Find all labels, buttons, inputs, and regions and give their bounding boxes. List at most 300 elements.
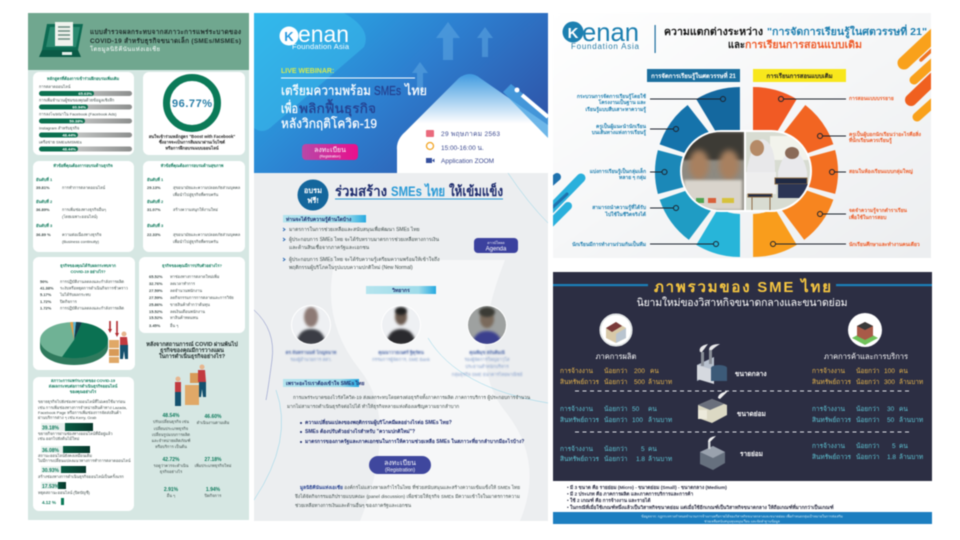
post-COVID plans: 48.54% xyxy=(163,413,180,419)
card: business adaptations: 25.86% xyxy=(149,302,163,307)
benefits list: มาตรการในการช่วยเหลือและสนับสนุนเพื่อพัฒนา SMEs ไทย xyxy=(289,226,420,233)
medium tier: 100 xyxy=(884,368,895,375)
micro tier xyxy=(560,436,923,470)
survey title: โดยมูลนิธิคีนันแห่งเอเชีย xyxy=(90,45,160,53)
card: health training topics: 31.07% xyxy=(147,207,161,212)
card: online impact bars: 17.53% xyxy=(42,484,60,490)
card: health training topics: สุขอนามัยและความปลอดภัยส่วนบุคคล xyxy=(173,185,241,191)
card: impact with pie chart: การปฏิบัติงานลดลงและกำลังการผลิต xyxy=(60,306,124,310)
panel: SME overview xyxy=(553,272,932,524)
micro tier: สินทรัพย์ถาวร xyxy=(560,455,600,463)
card: business training topics: 36.89% xyxy=(36,207,50,212)
card: courses with bars: เครือข่าย SMEs/MSMEs xyxy=(39,140,82,144)
card: business adaptations: 65.52% xyxy=(149,274,163,279)
right labels: เพื่อใช้ในการสอบ xyxy=(849,213,886,221)
medium tier: การจ้างงาน xyxy=(812,367,846,375)
card: business adaptations: อื่น ๆ xyxy=(169,323,178,328)
small tier: 50 xyxy=(887,417,895,424)
small tier: 30 xyxy=(887,406,895,413)
comparison title: ความแตกต่างระหว่าง xyxy=(664,26,763,38)
card: online impact bars: เช่น การเพิ่มช่องทางการจำหน่ายสินค้าทาง Lazada, xyxy=(38,405,127,410)
benefits list: และด้านสินเชื่อจากภาครัฐและเอกชน xyxy=(289,244,370,251)
right labels: ครูเป็นผู้บอกนักเรียนว่าอะไรคือสิ่ง xyxy=(849,130,922,139)
medium tier: น้อยกว่า xyxy=(856,378,880,386)
card: online impact bars: ของคุณอย่างไร xyxy=(70,389,97,395)
logo: Kenan blue: enan xyxy=(582,17,639,47)
registration button: ลงทะเบียน xyxy=(384,459,416,467)
card: online impact bars: สภาวะการแพร่ระบาดของ COVID-19 xyxy=(51,378,116,383)
comparison title: และ xyxy=(728,40,745,51)
card: business training topics: การทำการตลาดออนไลน์ xyxy=(62,185,105,190)
logo: Kenan white: enan xyxy=(298,21,349,47)
card: courses with bars: การเพิ่มจำนวนผู้ชมของคุณด้วยข้อมูลเชิงลึก xyxy=(39,98,115,104)
micro tier: คน xyxy=(648,446,657,453)
definition notes: • ใช้ 2 เกณฑ์ คือ การจ้างงาน และรายได้ xyxy=(567,497,651,504)
pie chart xyxy=(40,322,108,365)
card: online impact bars: สถานะออนไลน์ยังคงเหมือนเดิม xyxy=(38,453,92,458)
micro tier: น้อยกว่า xyxy=(604,445,628,453)
card: impact with pie chart: ปิดกิจการ xyxy=(59,299,78,304)
card: business adaptations: ลดจำนวนพนักงาน xyxy=(170,288,202,293)
panel: live webinar poster xyxy=(254,13,548,521)
definition notes xyxy=(567,484,834,511)
tab: traditional teaching: การเรียนการสอนแบบเดิม xyxy=(766,72,833,80)
card: online impact bars: ผ่านบริการต่าง ๆ เช่น Kerry, Grab xyxy=(38,415,97,420)
register button xyxy=(302,144,358,160)
right labels: นักเรียนศึกษาและทำงานคนเดียว xyxy=(849,241,920,248)
small tier: 50 xyxy=(632,406,640,413)
right ring xyxy=(664,83,842,261)
definition notes: • มี 2 ประเภท คือ ภาคการผลิต และภาคการบริการและการค้า xyxy=(567,490,693,498)
card: impact with pie chart: ไม่ได้รับผลกระทบ xyxy=(59,292,91,297)
overview title xyxy=(553,277,932,309)
speaker 3 xyxy=(452,305,523,378)
icon: micro factory xyxy=(700,436,725,470)
card: online impact bars: ขยายธุรกิจไปยังช่องทางออนไลน์ที่ไม่เคยใช้มาก่อน xyxy=(38,399,126,405)
speaker 2: กรรมการผู้จัดการ, SME Bank xyxy=(372,357,431,363)
why help SMEs xyxy=(283,379,531,445)
post-COVID plans: ธุรกิจอย่างไร xyxy=(160,469,183,475)
panel: 21st century learning comparison xyxy=(548,13,937,261)
card: impact with pie chart: การปฏิบัติงานลดลงและกำลังการผลิต xyxy=(60,279,124,284)
small tier: ขนาดย่อม xyxy=(737,410,766,418)
why help SMEs: SMEs ต้องปรับตัวอย่างไรสำหรับ "ความปกติใหม่"? xyxy=(305,428,415,435)
card: business adaptations: หาสินค้าทดแทน xyxy=(170,315,198,320)
post-COVID plans: หรือบริการ เป็นต้น xyxy=(155,443,187,449)
card: business adaptations: 32.76% xyxy=(149,281,163,286)
card: business training topics: อันดับที่ 1 xyxy=(36,176,53,182)
medium tier xyxy=(560,344,923,386)
card: impact with pie chart: ธุรกิจของคุณได้รับผลกระทบจาก xyxy=(60,262,116,269)
speaker 3: คุณพิมุข สงันติมณี xyxy=(469,349,506,356)
medium tier: สินทรัพย์ถาวร xyxy=(560,378,600,386)
card: courses with bars: การตลาดออนไลน์ xyxy=(39,84,71,89)
register button: ลงทะเบียน xyxy=(314,146,346,154)
logo: Kenan white: Foundation Asia xyxy=(292,42,350,51)
card: business adaptations: หาช่องทางการตลาดใหม่เพิ่ม xyxy=(170,274,220,279)
card: impact with pie chart: 41.38% xyxy=(40,286,54,290)
card: health training topics: เพื่อนำไปสู่ธุรกิจที่ครบครัน xyxy=(173,192,219,198)
small tier: 100 xyxy=(632,417,643,424)
logo: Kenan blue xyxy=(562,17,640,51)
micro tier: 1.8 xyxy=(636,456,645,463)
card: courses with bars: หลักสูตรที่ต้องการเข้าร่วมฝึกอบรมเพิ่มเติม xyxy=(47,75,119,82)
card: health training topics: อันดับที่ 3 xyxy=(147,222,164,228)
card: impact with pie chart: 1.72% xyxy=(40,306,52,310)
post-COVID plans: รอดูว่าควรจะดำเนิน xyxy=(154,463,189,469)
source band xyxy=(553,512,932,524)
speaker 3: กลุ่มธุรกิจ SME ธนาคารไทยพาณิชย์ xyxy=(452,371,523,378)
card: business training topics: ความต่อเนื่องทางธุรกิจ xyxy=(62,232,101,238)
registration button xyxy=(369,456,431,474)
speaker 3: รองผู้จัดการใหญ่อาวุโส xyxy=(464,356,510,363)
icon: medium factory xyxy=(697,344,727,384)
card: business training topics: อันดับที่ 2 xyxy=(36,198,53,204)
benefits list: ผู้ประกอบการ SMEs ไทย จะได้รับทราบมาตรการช่วยเหลือทางการเงิน xyxy=(289,236,440,243)
right callouts xyxy=(770,96,846,246)
decorative up arrows xyxy=(412,22,493,93)
card: courses with bars xyxy=(33,72,134,155)
event details: 15:00-16:00 น. xyxy=(441,145,484,152)
icon: laptop with document xyxy=(39,22,83,57)
webinar title: หลังวิกฤติโควิด-19 xyxy=(281,116,377,131)
card: impact with pie chart: 50% xyxy=(40,279,48,284)
speaker 3: ประธานสำหนักบริหาร xyxy=(465,363,509,369)
card: health training topics: เพื่อนำไปสู่ธุรกิจที่ครบครัน xyxy=(173,239,219,245)
card: business adaptations: ธุรกิจของคุณมีการปรับตัวอย่างไร? xyxy=(162,262,223,269)
soft background shapes xyxy=(254,173,548,521)
small tier: ล้านบาท xyxy=(899,416,923,424)
comparison title: การเรียนการสอนแบบเดิม xyxy=(745,39,862,51)
small tier xyxy=(560,391,923,424)
post-COVID plans: 27.18% xyxy=(205,457,222,463)
logo: Kenan blue: Foundation Asia xyxy=(571,42,640,51)
speakers heading xyxy=(366,286,436,294)
right labels: การสอนแบบบรรยาย xyxy=(849,96,894,102)
micro tier: คน xyxy=(899,443,908,450)
left labels: นักเรียนมีการทำงานร่วมกันเป็นทีม xyxy=(572,240,646,248)
manufacturing sector label: ภาคการผลิต xyxy=(596,352,637,361)
card: business adaptations: ลดเงินเดือนพนักงาน xyxy=(170,309,205,314)
speaker 2 xyxy=(372,305,431,363)
logo: Kenan blue: K xyxy=(568,25,579,42)
small tier: การจ้างงาน xyxy=(560,405,594,413)
tab: 21st century learning xyxy=(647,69,740,82)
card: courses with bars: Instagram สำหรับธุรกิจ xyxy=(39,126,79,132)
left labels: ไปใช้ในชีวิตจริงได้ xyxy=(604,211,646,218)
speaker 1: รองผู้อำนวยการ สสว. xyxy=(290,356,332,363)
card: courses with bars: 48.44% xyxy=(62,146,76,152)
left labels: หลาย ๆ กลุ่ม xyxy=(619,174,646,181)
micro tier: น้อยกว่า xyxy=(856,453,880,461)
post-COVID plans: หลังจากสถานการณ์ COVID ผ่านพ้นไป xyxy=(146,340,238,348)
post-COVID plans: ในการดำเนินธุรกิจอย่างไร? xyxy=(159,352,226,360)
left labels: แบ่งการเรียนรู้เป็นกลุ่มเล็ก xyxy=(590,167,646,176)
panel: survey infographic xyxy=(28,13,249,520)
card: donut 96.77%: ซึ่งอาจจะเป็นการสัมมนาผ่านเว็บไซต์ xyxy=(159,138,225,144)
foundation note: มูลนิธิคีนันแห่งเอเชีย องค์กรไม่แสวงหาผลกำไรในไทย ที่ช่วยสนับสนุนและสร้างความเข้มแข็งให้ SMEs ไทย xyxy=(300,483,520,492)
medium tier: 500 xyxy=(634,379,645,386)
post-COVID plans: 2.91% xyxy=(164,487,179,493)
free training badge: อบรม xyxy=(304,186,322,195)
agenda button: Agenda xyxy=(486,246,507,252)
card: business adaptations: 27.59% xyxy=(149,288,163,293)
card: online impact bars: สร้างช่องทางการดำเนินธุรกิจออนไลน์เป็นครั้งแรก xyxy=(38,472,124,480)
card: online impact bars: ส่งผลกระทบต่อการดำเนินธุรกิจออนไลน์ xyxy=(49,384,118,390)
medium tier: 300 xyxy=(884,379,895,386)
micro tier: น้อยกว่า xyxy=(856,442,880,450)
post-COVID plans: 42.72% xyxy=(163,457,180,463)
right labels: ที่นักเรียนควรเรียนรู้ xyxy=(849,136,892,145)
survey header xyxy=(28,13,249,70)
left labels: เรียนรู้แบบสืบเสาะหาความรู้ xyxy=(585,106,646,114)
icon: workers lifting boxes xyxy=(175,364,206,406)
micro tier: 5 xyxy=(641,446,645,453)
right labels: สอนในห้องเรียนแบบกลุ่มใหญ่ xyxy=(849,168,914,175)
event details xyxy=(426,130,500,165)
micro tier: การจ้างงาน xyxy=(560,445,594,453)
card: health training topics: 29.13% xyxy=(147,185,161,190)
small tier: คน xyxy=(899,406,908,413)
benefits list: ผู้ประกอบการ SMEs ไทย จะได้รับความรู้เตรียมความพร้อมให้เข้าใจถึง xyxy=(289,256,440,263)
left labels xyxy=(572,93,647,248)
medium tier: น้อยกว่า xyxy=(856,367,880,375)
why help SMEs: มาตรการของภาครัฐและภาคเอกชนในการให้ความช่วยเหลือ SMEs ในสภาวะที่ยากลำบากมีอะไรบ้าง? xyxy=(305,437,524,445)
speaker 1: ดร.จันทรานนท์ โกญจนาท xyxy=(286,349,336,356)
post-COVID plans: เปลี่ยนรูปแบบการผลิต xyxy=(152,432,190,438)
logo: Kenan white xyxy=(280,21,350,51)
survey title: แบบสำรวจผลกระทบจากสภาวะการแพร่ระบาดของ xyxy=(90,28,241,36)
why help SMEs: เพราะอะไรเราต้องเข้าใจ SMEs ไทย xyxy=(286,380,364,387)
micro tier: ล้านบาท xyxy=(899,453,923,461)
webinar hero banner xyxy=(254,13,548,173)
card: donut 96.77%: 96.77% xyxy=(172,98,212,110)
small tier: การจ้างงาน xyxy=(812,405,846,413)
card: business training topics: การเพิ่มช่องทางธุรกิจอื่นๆ xyxy=(62,207,106,213)
section heading: ร่วมสร้าง xyxy=(335,183,387,199)
card: courses with bars: 48.44% xyxy=(62,132,76,138)
webinar title: พลิกฟื้นธุรกิจ xyxy=(299,99,376,117)
card: donut 96.77%: หรือการฝึกอบรมแบบออนไลน์ xyxy=(165,144,219,150)
right labels xyxy=(849,96,922,248)
icon: worker with boxes and down arrows xyxy=(108,321,128,363)
right labels: จดจำความรู้จากตำราเรียน xyxy=(849,207,907,215)
benefits list: พฤติกรรมผู้บริโภคในรูปแบบความปกติใหม่ (New Normal) xyxy=(289,264,413,271)
card: business adaptations xyxy=(139,257,245,333)
card: courses with bars: 65.63% xyxy=(78,91,92,96)
card: health training topics xyxy=(143,161,245,252)
icon: small factory xyxy=(698,391,728,423)
small tier: น้อยกว่า xyxy=(604,416,628,424)
agenda button xyxy=(474,238,518,253)
overview title: นิยามใหม่ของวิสาหกิจขนาดกลางและขนาดย่อม xyxy=(637,296,848,309)
card: health training topics: อันดับที่ 1 xyxy=(147,176,164,182)
foundation note xyxy=(295,483,520,509)
medium tier: 200 xyxy=(634,368,645,375)
speaker 1 xyxy=(286,305,336,363)
card: online impact bars: 39.18% xyxy=(42,426,60,432)
micro tier: การจ้างงาน xyxy=(812,442,846,450)
foundation note: จึงได้จัดกิจกรรมอภิปรายแบบคณะ (panel discussion) เพื่อช่วยให้ธุรกิจ SMEs มีความเข้าใจในมาตรการความ xyxy=(295,493,520,500)
post-COVID plans: 1.94% xyxy=(206,487,221,493)
card: courses with bars: การลงโฆษณาใน Facebook (Facebook Ads) xyxy=(39,112,117,116)
card: online impact bars: 4.12 % xyxy=(42,500,56,505)
card: impact with pie chart: 5.17% xyxy=(40,292,52,297)
card: online impact bars: ไม่มีการเปลี่ยนแปลงแนวทางการทำการตลาดออนไลน์ xyxy=(37,458,131,463)
card: health training topics: สร้างความสนุกให้งานใหม่ xyxy=(173,207,218,213)
foundation note: ช่วยเหลือทางการเงินและด้านอื่นๆ ของภาครัฐและเอกชน xyxy=(295,502,412,509)
left ring xyxy=(651,83,829,261)
post-COVID plans: ธุรกิจของคุณมีการวางแผน xyxy=(160,347,224,354)
medium tier: สินทรัพย์ถาวร xyxy=(812,378,852,386)
free training badge xyxy=(298,180,328,210)
card: business adaptations: 15.52% xyxy=(149,309,163,314)
comparison title: "การจัดการเรียนรู้ในศตวรรษที่ 21" xyxy=(767,24,927,39)
section heading xyxy=(335,182,503,200)
micro tier: รายย่อม xyxy=(740,450,763,458)
card: business adaptations: 15.52% xyxy=(149,315,163,320)
free training badge: ฟรี! xyxy=(307,196,319,205)
micro tier: 1.8 xyxy=(887,454,896,461)
post-COVID plans: ปิดกิจการ xyxy=(204,493,222,498)
card: online impact bars: หยุดสถานะออนไลน์ (ปิดบัญชี) xyxy=(38,490,91,496)
micro tier: สินทรัพย์ถาวร xyxy=(812,453,852,461)
post-COVID plans: เพิ่มประเภทธุรกิจใหม่ xyxy=(195,463,232,469)
card: business training topics: 39.81% xyxy=(36,185,50,190)
card: impact with pie chart: 1.72% xyxy=(40,299,52,304)
medium tier: คน xyxy=(650,368,659,375)
small tier: ล้านบาท xyxy=(648,416,672,424)
speakers heading: วิทยากร xyxy=(392,287,410,294)
left labels: โครงงานเป็นฐาน และ xyxy=(598,98,646,106)
why help SMEs: มากไม่สามารถดำเนินธุรกิจต่อไปได้ ทำให้ธุรกิจหลายแห่งต้องเผชิญความยากลำบาก xyxy=(287,403,459,410)
registration button: (Registration) xyxy=(385,468,415,474)
overview title: ภาพรวมของ SME ไทย xyxy=(654,277,831,296)
post-COVID plans xyxy=(146,340,238,498)
card: business training topics: หัวข้อที่คุณต้องการอบรมด้านธุรกิจ xyxy=(53,162,113,169)
card: business adaptations: ลดเวลาทำการ xyxy=(170,281,196,286)
card: business adaptations: ลดกิจกรรมการการตลาดและการวิจัย xyxy=(170,295,234,300)
card: courses with bars: 60.94% xyxy=(72,104,86,110)
agenda button: ดาวน์โหลด xyxy=(487,240,505,245)
classroom photo xyxy=(680,130,812,212)
micro tier: น้อยกว่า xyxy=(604,455,628,463)
small tier: สินทรัพย์ถาวร xyxy=(812,416,852,424)
micro tier: ล้านบาท xyxy=(648,455,672,463)
webinar title: เตรียมความพร้อม xyxy=(281,83,371,98)
card: online impact bars: Facebook Page หรือการเพิ่มช่องการจัดส่งสินค้า xyxy=(38,410,121,415)
medium tier: น้อยกว่า xyxy=(604,378,628,386)
medium tier: ล้านบาท xyxy=(899,378,923,386)
card: impact with pie chart: ระงับหรือหยุดการดำเนินกิจการชั่วคราว xyxy=(60,286,128,292)
definition notes: • ในกรณีที่เมื่อใช้เกณฑ์หนึ่งแล้วเป็นวิสาหกิจขนาดย่อม แต่เมื่อใช้อีกเกณฑ์เป็นวิสาหกิจขนาดกลาง ให้ถือเกณฑ์ที่มากกว่าเป็นเกณฑ์ xyxy=(567,503,834,511)
webinar title: SMEs xyxy=(374,83,401,98)
section heading: SMEs ไทย xyxy=(391,182,445,199)
card: business adaptations: 3.45% xyxy=(149,323,161,328)
post-COVID plans: อื่น ๆ xyxy=(166,493,175,498)
medium tier: น้อยกว่า xyxy=(604,367,628,375)
left labels: ครูเป็นผู้แนะนำนักเรียน xyxy=(596,122,647,131)
comparison title xyxy=(664,24,927,51)
small tier: น้อยกว่า xyxy=(604,405,628,413)
medium tier: การจ้างงาน xyxy=(560,367,594,375)
post-COVID plans: และจำหน่ายผลิตภัณฑ์ xyxy=(152,438,190,443)
small tier: น้อยกว่า xyxy=(856,405,880,413)
card: business adaptations: 27.59% xyxy=(149,295,163,300)
section heading: ให้เข้มแข็ง xyxy=(449,182,503,199)
card: impact with pie chart: COVID-19 อย่างไร? xyxy=(70,269,106,274)
card: impact with pie chart xyxy=(33,257,135,370)
left callouts xyxy=(650,96,726,246)
survey title: COVID-19 สำหรับธุรกิจขนาดเล็ก (SMEs/MSMEs) xyxy=(90,36,241,45)
speaker 2: คุณนาวาธเนศร์ ฐิตุรัตน xyxy=(378,349,425,356)
post-COVID plans: เปลี่ยนประเภทธุรกิจ xyxy=(154,426,188,432)
card: courses with bars: 59.38% xyxy=(69,118,83,124)
webinar title: LIVE WEBINAR: xyxy=(281,68,334,75)
card: health training topics: อันดับที่ 2 xyxy=(147,198,164,204)
icon: trade and service sector xyxy=(848,313,882,347)
register button: (Registration) xyxy=(319,154,341,158)
decoration: orange stripes xyxy=(904,33,937,117)
card: donut 96.77%: สนใจเข้าร่วมหลักสูตร "Boost with Facebook" xyxy=(149,133,235,140)
small tier: น้อยกว่า xyxy=(856,416,880,424)
card: health training topics: หัวข้อที่คุณต้องการอบรมด้านสุขภาพ xyxy=(161,162,224,169)
micro tier: 5 xyxy=(892,443,896,450)
post-COVID plans: ปรับเปลี่ยนธุรกิจ เช่น xyxy=(153,419,189,425)
webinar title: เพื่อ xyxy=(281,100,298,116)
card: health training topics: 22.33% xyxy=(147,232,161,237)
decoration: blue stripes xyxy=(548,177,581,226)
why help SMEs: ความเปลี่ยนแปลงของพฤติกรรมผู้บริโภคมีผลอย่างไรต่อ SMEs ไทย? xyxy=(305,418,452,427)
left labels: สามารถนำความรู้ที่ได้รับ xyxy=(592,203,646,212)
webinar title xyxy=(281,68,427,131)
survey title xyxy=(90,28,241,53)
card: online impact bars: เช่น ออกไปยังต้นไม้ใหม่ xyxy=(38,436,80,441)
card: business training topics: (Business continuity) xyxy=(62,239,100,244)
card: business training topics: อันดับที่ 3 xyxy=(36,222,53,228)
card: online impact bars xyxy=(33,377,134,511)
card: business training topics: (โดยเฉพาะออนไลน์) xyxy=(62,214,98,219)
post-COVID plans: 46.60% xyxy=(205,414,222,420)
source band: ช่วยเหลือสนับสนุนทุนหมุนเวียน และจัดทำฐานข้อมูล xyxy=(704,518,780,524)
card: donut 96.77% xyxy=(143,72,245,155)
webinar title: ไทย xyxy=(404,83,427,98)
card: online impact bars: 30.93% xyxy=(42,468,60,474)
small tier: คน xyxy=(648,406,657,413)
card: health training topics: สุขอนามัยและความปลอดภัยส่วนบุคคล xyxy=(173,232,241,238)
card: business training topics xyxy=(33,161,134,252)
small tier: สินทรัพย์ถาวร xyxy=(560,416,600,424)
card: online impact bars: ขยายกิจการผ่านช่องทางออนไลน์ที่มีอยู่แล้ว xyxy=(38,431,113,437)
card: online impact bars: 36.08% xyxy=(42,448,60,454)
tab: 21st century learning: การจัดการเรียนรู้ในศตวรรษที่ 21 xyxy=(651,71,737,81)
why help SMEs: การแพร่ระบาดของไวรัสโควิด-19 ส่งผลกระทบโดยตรงต่อธุรกิจทั้งภาคการผลิต ภาคการบริการ ผู้ประกอบการจำนวน xyxy=(293,393,531,401)
icon: manufacturing sector xyxy=(599,313,633,347)
left labels: กระบวนการจัดการเรียนรู้โดยใช้ xyxy=(577,93,647,101)
definition notes: • มี 3 ขนาด คือ รายย่อม (Micro) - ขนาดย่อม (Small) - ขนาดกลาง (Medium) xyxy=(567,484,727,491)
logo: Kenan white: K xyxy=(284,29,294,44)
card: business training topics: 36.89 % xyxy=(36,232,51,237)
benefits list: ท่านจะได้รับความรู้ด้านใดบ้าง xyxy=(286,216,352,224)
trade and service sector label: ภาคการค้าและการบริการ xyxy=(824,352,908,361)
event details: Application ZOOM xyxy=(441,158,494,165)
benefits list xyxy=(283,215,440,271)
source band: ข้อมูลจาก: กฎกระทรวงกำหนดจำนวนการจ้างงานหรือรายได้ของวิสาหกิจขนาดกลางและขนาดย่อม เพื่อกำหนดกลุ่มเป้าหมายในการส่งเสริม xyxy=(641,514,843,520)
medium tier: ขนาดกลาง xyxy=(735,371,767,378)
event details: 29 พฤษภาคม 2563 xyxy=(441,131,500,138)
card: business adaptations: ขายสินค้าต่ำกว่าต้นทุน xyxy=(170,302,210,308)
left labels: บนเส้นทางแห่งการเรียนรู้ xyxy=(592,129,646,137)
